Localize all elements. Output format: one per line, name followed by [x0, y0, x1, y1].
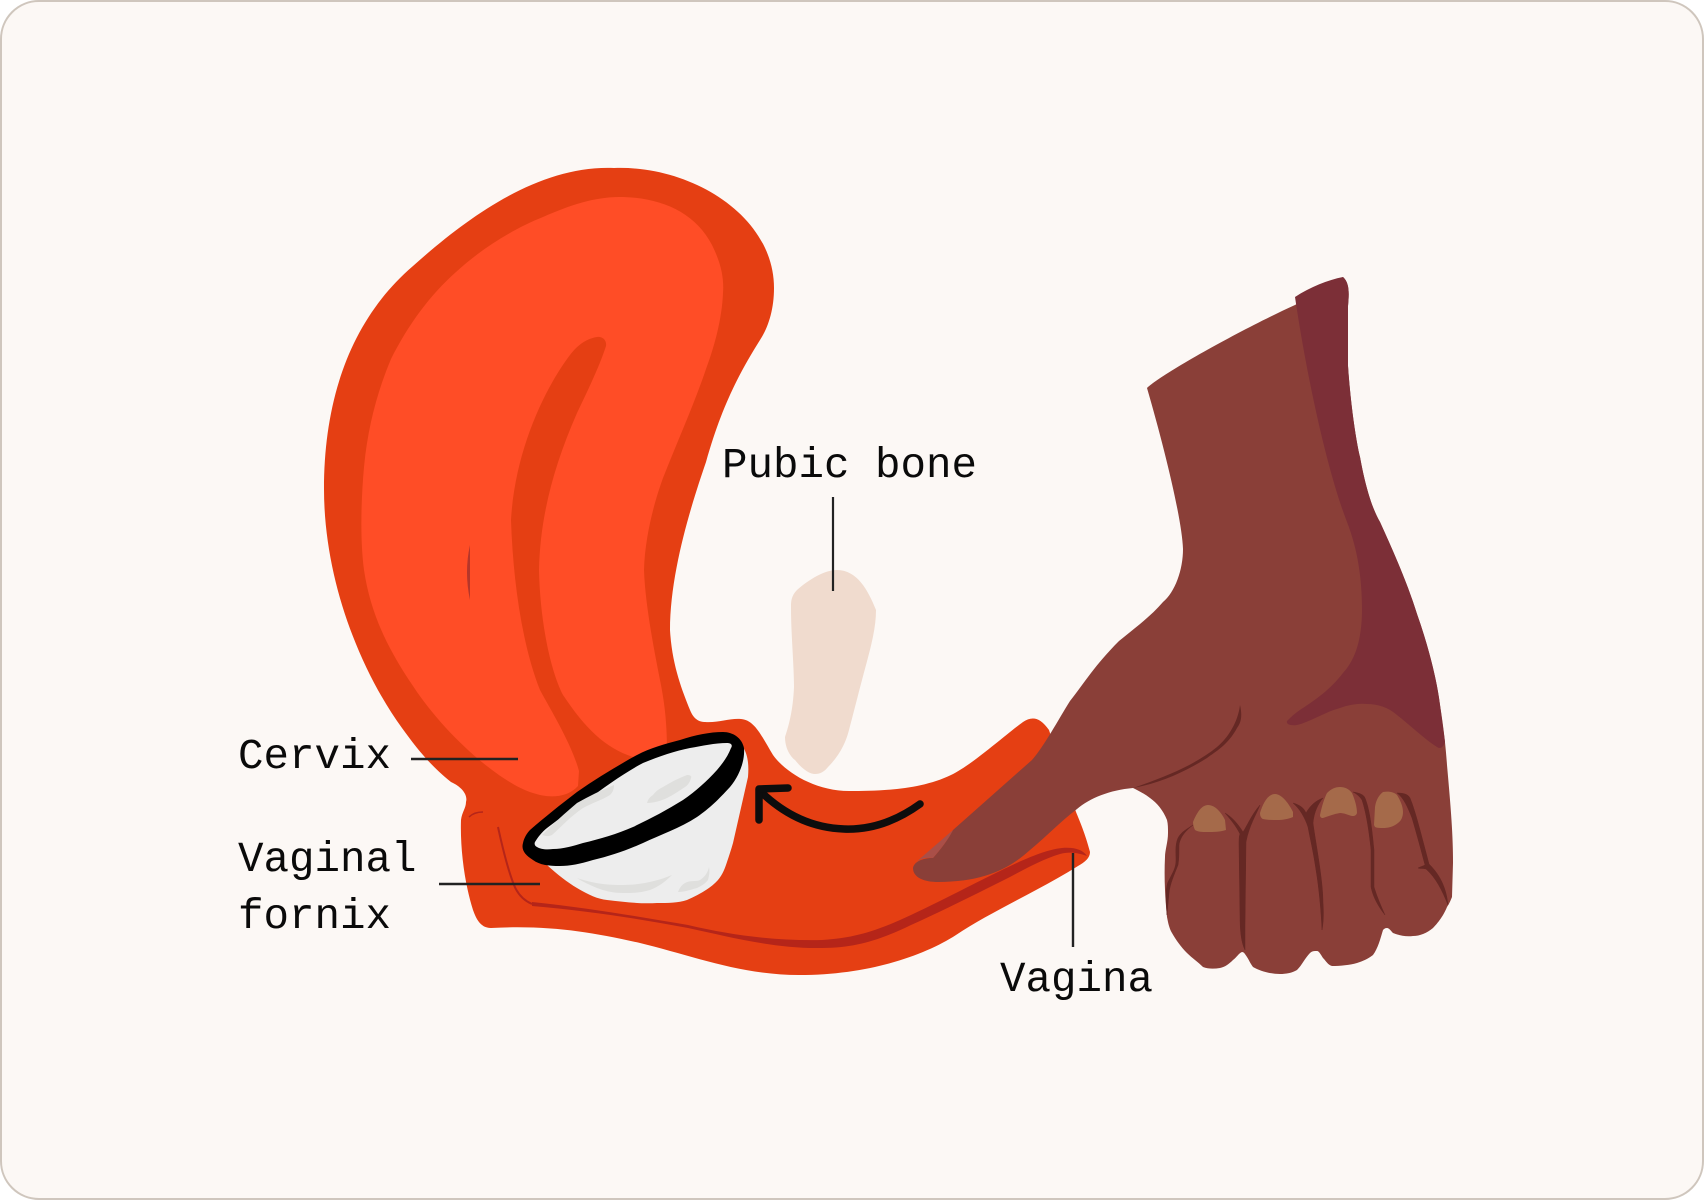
- hand: [913, 277, 1453, 974]
- label: vaginal fornix: fornix: [238, 893, 391, 941]
- fornix fold line: [498, 827, 532, 904]
- small slit in uterus: [467, 545, 470, 600]
- arrow: insertion direction: [759, 788, 920, 829]
- cup highlights: [577, 867, 709, 893]
- label line: cervix: [411, 758, 518, 760]
- hand shape: [913, 277, 1453, 974]
- pubic bone: [785, 570, 876, 774]
- label line: vagina: [1072, 853, 1074, 947]
- finger lines: [1166, 792, 1448, 950]
- uterus and vagina illustration: [324, 168, 1090, 975]
- cup interior: [535, 743, 732, 849]
- fingernails: [1193, 787, 1403, 832]
- small fold mark: [469, 812, 483, 817]
- label: vaginal fornix: Vaginal: [238, 836, 417, 884]
- vaginal wall line: [532, 848, 1087, 948]
- uterus and vagina outer wall: [324, 168, 1090, 975]
- rim inner highlights: [542, 775, 691, 836]
- thumb crease: [1133, 705, 1241, 788]
- fingertip highlight: [915, 830, 953, 863]
- uterine cavity: [361, 197, 723, 796]
- label: cervix: Cervix: [238, 733, 391, 781]
- label line: pubic bone: [832, 497, 834, 591]
- cup body: [547, 747, 748, 903]
- cup rim: [522, 732, 744, 866]
- label line: vaginal fornix: [439, 883, 540, 885]
- menstrual cup: [522, 732, 748, 903]
- back of hand shadow: [1287, 277, 1445, 748]
- label: vagina: Vagina: [1000, 956, 1153, 1004]
- label: pubic bone: Pubic bone: [722, 442, 977, 490]
